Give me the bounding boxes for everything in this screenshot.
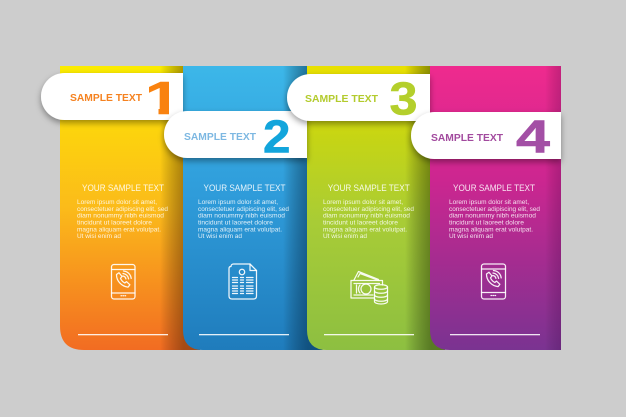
- tab 3 label: SAMPLE TEXT: [305, 93, 379, 105]
- text block: column 2: YOUR SAMPLE TEXT: [204, 183, 286, 194]
- text block: column 1: YOUR SAMPLE TEXT: [82, 183, 164, 194]
- icon: document column 2: [229, 264, 256, 299]
- number 1: 1: [145, 72, 181, 124]
- text block: column 4: magna aliquam erat volutpat.: [449, 226, 533, 233]
- text block: column 3: consectetuer adipiscing elit, sed: [323, 206, 414, 213]
- text block: column 1: diam nonummy nibh euismod: [77, 213, 164, 220]
- tab: step 1: [41, 73, 183, 120]
- text block: column 1: tincidunt ut laoreet dolore: [77, 220, 152, 226]
- panel: column 2 blue: [183, 66, 323, 350]
- rule: column 2: [199, 334, 289, 335]
- panel: column 4 magenta: [430, 66, 561, 350]
- text block: column 2: consectetuer adipiscing elit, sed: [198, 206, 289, 213]
- text block: column 4: tincidunt ut laoreet dolore: [449, 220, 524, 226]
- icon: phone call column 1: [112, 264, 135, 299]
- tab 4 label: SAMPLE TEXT: [431, 132, 504, 144]
- panel: column 1 orange: [60, 66, 200, 350]
- text block: column 3: tincidunt ut laoreet dolore: [323, 220, 398, 226]
- number 3: 3: [390, 72, 418, 124]
- text block: column 4: YOUR SAMPLE TEXT: [453, 183, 535, 194]
- text block: column 2: diam nonummy nibh euismod: [198, 213, 285, 220]
- text block: column 1: Ut wisi enim ad: [77, 233, 121, 240]
- rule: column 4: [450, 334, 540, 335]
- rule: column 3: [324, 334, 414, 335]
- text block: column 3: YOUR SAMPLE TEXT: [328, 183, 410, 194]
- tab 1 label: SAMPLE TEXT: [70, 92, 143, 104]
- text block: column 3: diam nonummy nibh euismod: [323, 213, 410, 220]
- icon: phone call column 4: [482, 264, 506, 299]
- text block: column 4: diam nonummy nibh euismod: [449, 213, 536, 220]
- text block: column 3: Ut wisi enim ad: [323, 233, 367, 240]
- text block: column 3: magna aliquam erat volutpat.: [323, 226, 407, 233]
- text block: column 4: Ut wisi enim ad: [449, 233, 493, 240]
- text block: column 4: Lorem ipsum dolor sit amet,: [449, 199, 529, 206]
- text block: column 3: Lorem ipsum dolor sit amet,: [323, 199, 403, 206]
- tab: step 3: [287, 74, 430, 121]
- text block: column 4: [449, 183, 540, 240]
- tab: step 2: [164, 111, 307, 158]
- text block: column 1: Lorem ipsum dolor sit amet,: [77, 199, 157, 206]
- text block: column 2: magna aliquam erat volutpat.: [198, 226, 282, 233]
- text block: column 2: Lorem ipsum dolor sit amet,: [198, 199, 278, 206]
- number 4: 4: [516, 110, 551, 162]
- text block: column 3: [323, 183, 414, 240]
- text block: column 1: consectetuer adipiscing elit, sed: [77, 206, 168, 213]
- text block: column 1: [77, 183, 168, 240]
- icon: cash and coins column 3: [351, 272, 388, 304]
- tab: step 4: [411, 112, 561, 159]
- tab 2 label: SAMPLE TEXT: [184, 131, 257, 143]
- text block: column 2: Ut wisi enim ad: [198, 233, 242, 240]
- text block: column 2: tincidunt ut laoreet dolore: [198, 220, 273, 226]
- rule: column 1: [78, 334, 168, 335]
- number 2: 2: [263, 110, 290, 162]
- text block: column 4: consectetuer adipiscing elit, sed: [449, 206, 540, 213]
- text block: column 1: magna aliquam erat volutpat.: [77, 226, 161, 233]
- text block: column 2: [198, 183, 289, 240]
- panel: column 3 green: [307, 66, 445, 350]
